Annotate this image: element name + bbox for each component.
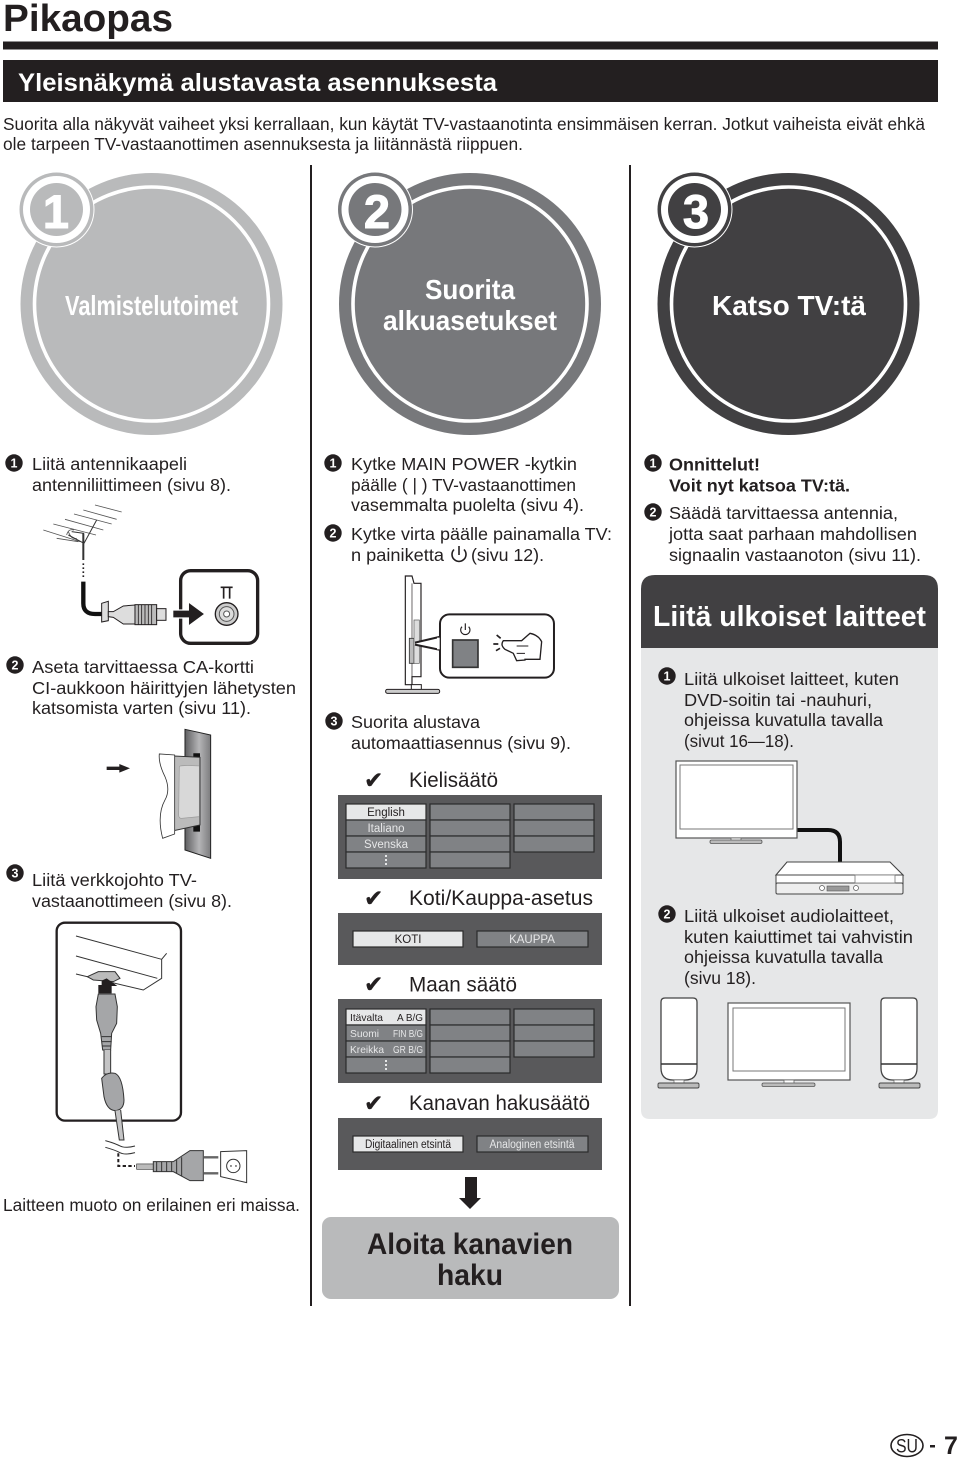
step 3 text: Liitä verkkojohto TV- — [32, 870, 197, 890]
check heading: Kielisäätö — [409, 768, 498, 792]
step 1 text: 1 — [664, 670, 671, 684]
step 2 text: Liitä ulkoiset audiolaitteet, — [684, 906, 894, 926]
language setting — [338, 768, 602, 879]
step 2 text: (sivu 12). — [471, 545, 544, 565]
step circle 2: 2 — [364, 185, 390, 238]
step 2 text: jotta saat parhaan mahdollisen — [668, 524, 917, 544]
step 2 text — [658, 905, 913, 988]
panel header — [641, 575, 938, 648]
note: Laitteen muoto on erilainen eri maissa. — [3, 1195, 300, 1215]
start channel search box: Aloita kanavien — [367, 1228, 573, 1261]
step circle 2: Suorita — [425, 274, 515, 305]
step 1 text: päälle ( | ) TV-vastaanottimen — [351, 475, 576, 495]
panel header: Liitä ulkoiset laitteet — [653, 601, 927, 633]
column 2 — [322, 454, 619, 1299]
check heading: ✔ — [364, 768, 383, 794]
step 1 text: Liitä antennikaapeli — [32, 454, 187, 474]
step 3 text: vastaanottimeen (sivu 8). — [32, 891, 232, 911]
check heading — [364, 972, 517, 998]
language menu panel — [338, 795, 602, 879]
step 1 text: 1 — [330, 456, 337, 470]
step 1 text: antenniliittimeen (sivu 8). — [32, 475, 231, 495]
illustration: speaker left — [658, 998, 699, 1088]
step 1 text: Liitä ulkoiset laitteet, kuten — [684, 669, 899, 689]
step 1 text — [5, 454, 231, 495]
step 2 text: kuten kaiuttimet tai vahvistin — [684, 927, 913, 947]
illustration: TV power button — [386, 576, 554, 693]
panel: connect external devices — [641, 575, 938, 1119]
step 1 text: DVD-soitin tai -nauhuri, — [684, 690, 872, 710]
country setting — [338, 972, 602, 1083]
step 3 text — [325, 712, 571, 753]
section heading bar: Yleisnäkymä alustavasta asennuksesta — [18, 69, 498, 97]
step circle 2 — [337, 172, 601, 435]
check heading: ✔ — [364, 886, 383, 912]
step 2 text: (sivu 18). — [684, 968, 756, 988]
step 2 text: CI-aukkoon häirittyjen lähetysten — [32, 678, 296, 698]
page number — [891, 1432, 958, 1460]
step 2 text: 2 — [330, 526, 337, 540]
step 2 text: 2 — [12, 658, 19, 672]
language menu panel: English — [367, 807, 405, 819]
step 2 text: Kytke virta päälle painamalla TV: — [351, 524, 612, 544]
column divider right — [629, 165, 631, 1306]
step 2 text: Säädä tarvittaessa antennia, — [669, 503, 898, 523]
step 1 text: ohjeissa kuvatulla tavalla — [684, 710, 883, 730]
step 3 text: Suorita alustava — [351, 712, 480, 732]
column 1 — [3, 454, 300, 1215]
language menu panel: Italiano — [367, 823, 405, 835]
step circle 3: Katso TV:tä — [712, 290, 866, 321]
step 3 text: 3 — [12, 866, 19, 880]
channel search panel — [338, 1118, 602, 1170]
step 2 text — [644, 503, 921, 565]
step 1 text: Kytke MAIN POWER -kytkin — [351, 454, 577, 474]
step 1 text: Onnittelut! — [669, 454, 760, 474]
step 1 text: 1 — [650, 456, 657, 470]
illustration: speaker right — [879, 998, 920, 1088]
page number: 7 — [944, 1432, 958, 1460]
start channel search box — [322, 1217, 619, 1299]
step 1 text: vasemmalta puolelta (sivu 4). — [351, 495, 584, 515]
check heading: Koti/Kauppa-asetus — [409, 886, 593, 910]
illustration: antenna and socket — [43, 505, 258, 643]
check heading: Maan säätö — [409, 972, 517, 996]
start channel search box: haku — [437, 1259, 503, 1292]
check heading: ✔ — [364, 972, 383, 998]
step circle 1: 1 — [43, 185, 69, 238]
illustration: power cord — [57, 923, 247, 1183]
panel background — [641, 648, 938, 1119]
country panel: Itävalta — [350, 1012, 383, 1024]
home/store panel: KAUPPA — [509, 934, 555, 946]
page number: SU — [896, 1436, 918, 1458]
step 2 text: katsomista varten (sivu 11). — [32, 698, 251, 718]
check heading — [364, 768, 498, 794]
step 1 text — [644, 454, 850, 496]
step 2 text: Aseta tarvittaessa CA-kortti — [32, 657, 254, 677]
step 2 text: 2 — [664, 908, 671, 922]
step 1 text: (sivut 16—18). — [684, 731, 794, 751]
section heading bar — [3, 60, 938, 102]
home/store setting — [338, 886, 602, 965]
step 2 text — [6, 656, 296, 718]
country panel — [338, 999, 602, 1083]
step circle 2: alkuasetukset — [383, 305, 557, 336]
title rule — [3, 42, 938, 50]
country panel: GR B/G — [393, 1044, 423, 1056]
step 2 text: 2 — [650, 506, 657, 520]
step 3 text: 3 — [331, 714, 338, 728]
column divider left — [310, 165, 312, 1306]
arrow down — [459, 1177, 481, 1209]
country panel: Kreikka — [350, 1044, 384, 1056]
step 1 text — [324, 454, 584, 515]
step 2 text: ohjeissa kuvatulla tavalla — [684, 947, 883, 967]
step 1 text: Voit nyt katsoa TV:tä. — [669, 476, 850, 496]
step 2 text — [324, 524, 612, 565]
step 1 text — [658, 667, 899, 751]
home/store panel — [338, 913, 602, 965]
country panel: Suomi — [350, 1028, 379, 1040]
step 2 text: n painiketta — [351, 545, 444, 565]
check heading: Kanavan hakusäätö — [409, 1091, 590, 1115]
step circle 1: Valmistelutoimet — [65, 290, 238, 321]
step circle 3: 3 — [683, 185, 709, 238]
check heading: ✔ — [364, 1091, 383, 1117]
step 2 text: signaalin vastaanoton (sivu 11). — [669, 545, 921, 565]
step 1 text: 1 — [11, 456, 18, 470]
language menu panel: Svenska — [364, 839, 409, 851]
channel search panel: Digitaalinen etsintä — [365, 1139, 452, 1151]
country panel: A B/G — [397, 1012, 423, 1024]
intro text: Suorita alla näkyvät vaiheet yksi kerrallaan, kun käytät TV-vastaanotinta ensimmäisen kerran. Jotkut vaiheista eivät ehkä — [3, 114, 925, 134]
channel search panel: Analoginen etsintä — [490, 1139, 575, 1151]
channel search setting — [338, 1091, 602, 1170]
illustration: CA card — [107, 729, 211, 858]
illustration: TV and DVD recorder — [676, 761, 903, 894]
intro text: ole tarpeen TV-vastaanottimen asennuksesta ja liitännästä riippuen. — [3, 134, 523, 154]
step circle 1 — [18, 172, 282, 435]
intro text — [3, 114, 925, 154]
country panel: FIN B/G — [393, 1028, 423, 1040]
step circle 3 — [656, 172, 920, 435]
illustration: TV — [728, 1003, 850, 1086]
step 3 text: automaattiasennus (sivu 9). — [351, 733, 571, 753]
step 3 text — [6, 864, 232, 911]
column 3 — [641, 454, 938, 1119]
home/store panel: KOTI — [395, 934, 421, 946]
